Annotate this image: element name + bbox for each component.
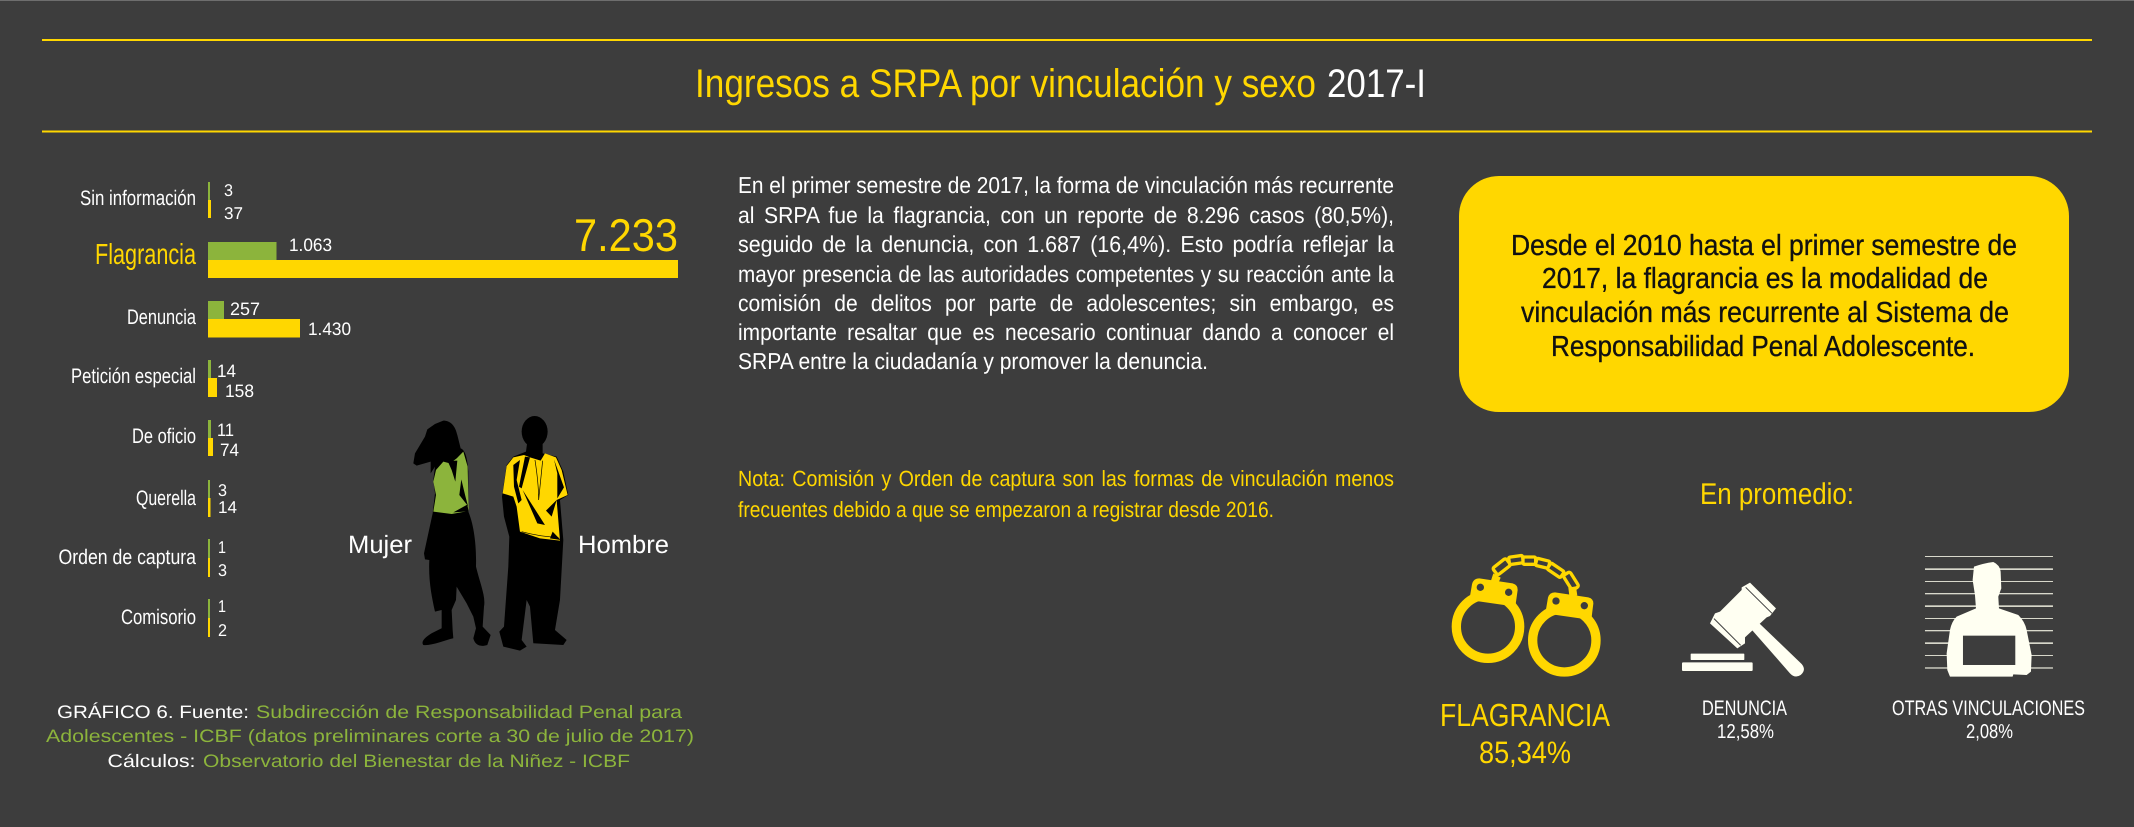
row: Sin información xyxy=(80,181,243,223)
row: Comisorio xyxy=(121,597,227,640)
row: Querella: 3 xyxy=(218,481,227,500)
stat: flagrancia xyxy=(1440,697,1611,770)
row: Denuncia: 257 xyxy=(230,299,260,319)
row: De oficio: De oficio xyxy=(132,425,196,448)
row: Comisorio: 2 xyxy=(218,621,227,640)
row: Flagrancia: Flagrancia xyxy=(95,239,197,271)
row: De oficio xyxy=(132,420,239,460)
panel: bar chart by vinculación and sex xyxy=(58,181,678,640)
illustration: man silhouette with yellow shirt xyxy=(499,416,568,651)
row: Flagrancia xyxy=(95,209,678,278)
text block: main paragraph: mayor presencia de las autoridades competentes y su reacción ante la xyxy=(738,261,1394,287)
source note: Observatorio del Bienestar de la Niñez - ICBF xyxy=(203,751,630,771)
row: Querella xyxy=(136,480,237,517)
row: Orden de captura: 3 xyxy=(218,561,227,580)
callout: yellow box xyxy=(1459,176,2069,412)
row: Flagrancia: 7.233 xyxy=(574,209,678,261)
row: De oficio: 11 xyxy=(217,420,234,440)
row: Denuncia xyxy=(127,299,351,339)
callout: yellow box: vinculación más recurrente al Sistema de xyxy=(1521,297,2009,329)
row: Orden de captura: Orden de captura xyxy=(58,546,196,569)
text block: note: frecuentes debido a que se empezaron a registrar desde 2016. xyxy=(738,497,1274,522)
callout: yellow box: 2017, la flagrancia es la modalidad de xyxy=(1542,263,1988,295)
row: Sin información: Sin información xyxy=(80,187,196,210)
label: Mujer: Mujer xyxy=(348,531,412,559)
row: Orden de captura: 1 xyxy=(218,538,226,557)
row: Petición especial: 158 xyxy=(225,381,254,401)
text block: main paragraph: importante resaltar que es necesario continuar dando a conocer el xyxy=(738,319,1394,345)
text block: main paragraph: SRPA entre la ciudadanía y promover la denuncia. xyxy=(738,348,1208,374)
text block: main paragraph: En el primer semestre de 2017, la forma de vinculación más recurrente xyxy=(738,172,1394,198)
row: Petición especial xyxy=(71,360,254,401)
text block: note xyxy=(738,466,1394,522)
row: Sin información: 37 xyxy=(224,204,243,223)
source note: GRÁFICO 6. Fuente: xyxy=(57,702,249,722)
source note xyxy=(46,702,694,771)
row: Querella: Querella xyxy=(136,487,196,510)
text block: main paragraph: comisión de delitos por parte de adolescentes; sin embargo, es xyxy=(738,290,1394,316)
text block: main paragraph: al SRPA fue la flagrancia, con un reporte de 8.296 casos (80,5%), xyxy=(738,202,1394,228)
stat: flagrancia: 85,34% xyxy=(1479,735,1571,770)
icon: gavel xyxy=(1682,583,1804,676)
row: Petición especial: 14 xyxy=(217,361,236,381)
heading: En promedio: En promedio: xyxy=(1700,478,1854,511)
label: Hombre: Hombre xyxy=(578,531,669,559)
stat: flagrancia: FLAGRANCIA xyxy=(1440,697,1611,733)
row: Denuncia: Denuncia xyxy=(127,306,196,329)
row: Comisorio: 1 xyxy=(218,597,226,616)
title: Ingresos a SRPA por vinculación y sexo xyxy=(695,62,1316,106)
icon: handcuffs xyxy=(1456,555,1596,672)
row: Petición especial: Petición especial xyxy=(71,365,196,388)
row: Orden de captura xyxy=(58,538,227,580)
callout: yellow box: Desde el 2010 hasta el primer semestre de xyxy=(1511,230,2017,262)
row: Denuncia: 1.430 xyxy=(308,319,351,339)
text block: main paragraph: seguido de la denuncia, con 1.687 (16,4%). Esto podría reflejar la xyxy=(738,231,1394,257)
row: Querella: 14 xyxy=(218,498,237,517)
stat: denuncia: 12,58% xyxy=(1717,721,1774,743)
row: Flagrancia: 1.063 xyxy=(289,235,332,255)
row: Sin información: 3 xyxy=(224,181,233,200)
icon: mugshot xyxy=(1925,556,2053,677)
row: De oficio: 74 xyxy=(220,440,239,460)
source note: Cálculos: xyxy=(108,751,196,771)
text block: note: Nota: Comisión y Orden de captura son las formas de vinculación menos xyxy=(738,466,1394,491)
callout: yellow box: Responsabilidad Penal Adolescente. xyxy=(1551,331,1975,363)
stat: denuncia xyxy=(1702,697,1787,743)
text block: main paragraph xyxy=(738,172,1394,374)
source note: Adolescentes - ICBF (datos preliminares corte a 30 de julio de 2017) xyxy=(46,726,694,746)
illustration: woman silhouette with green top xyxy=(413,421,491,646)
source note: Subdirección de Responsabilidad Penal para xyxy=(256,702,683,722)
stat: denuncia: DENUNCIA xyxy=(1702,697,1787,720)
stat: otras vinculaciones xyxy=(1892,697,2085,743)
row: Comisorio: Comisorio xyxy=(121,606,196,629)
title: 2017-I xyxy=(1327,62,1426,106)
stat: otras vinculaciones: 2,08% xyxy=(1966,721,2013,743)
